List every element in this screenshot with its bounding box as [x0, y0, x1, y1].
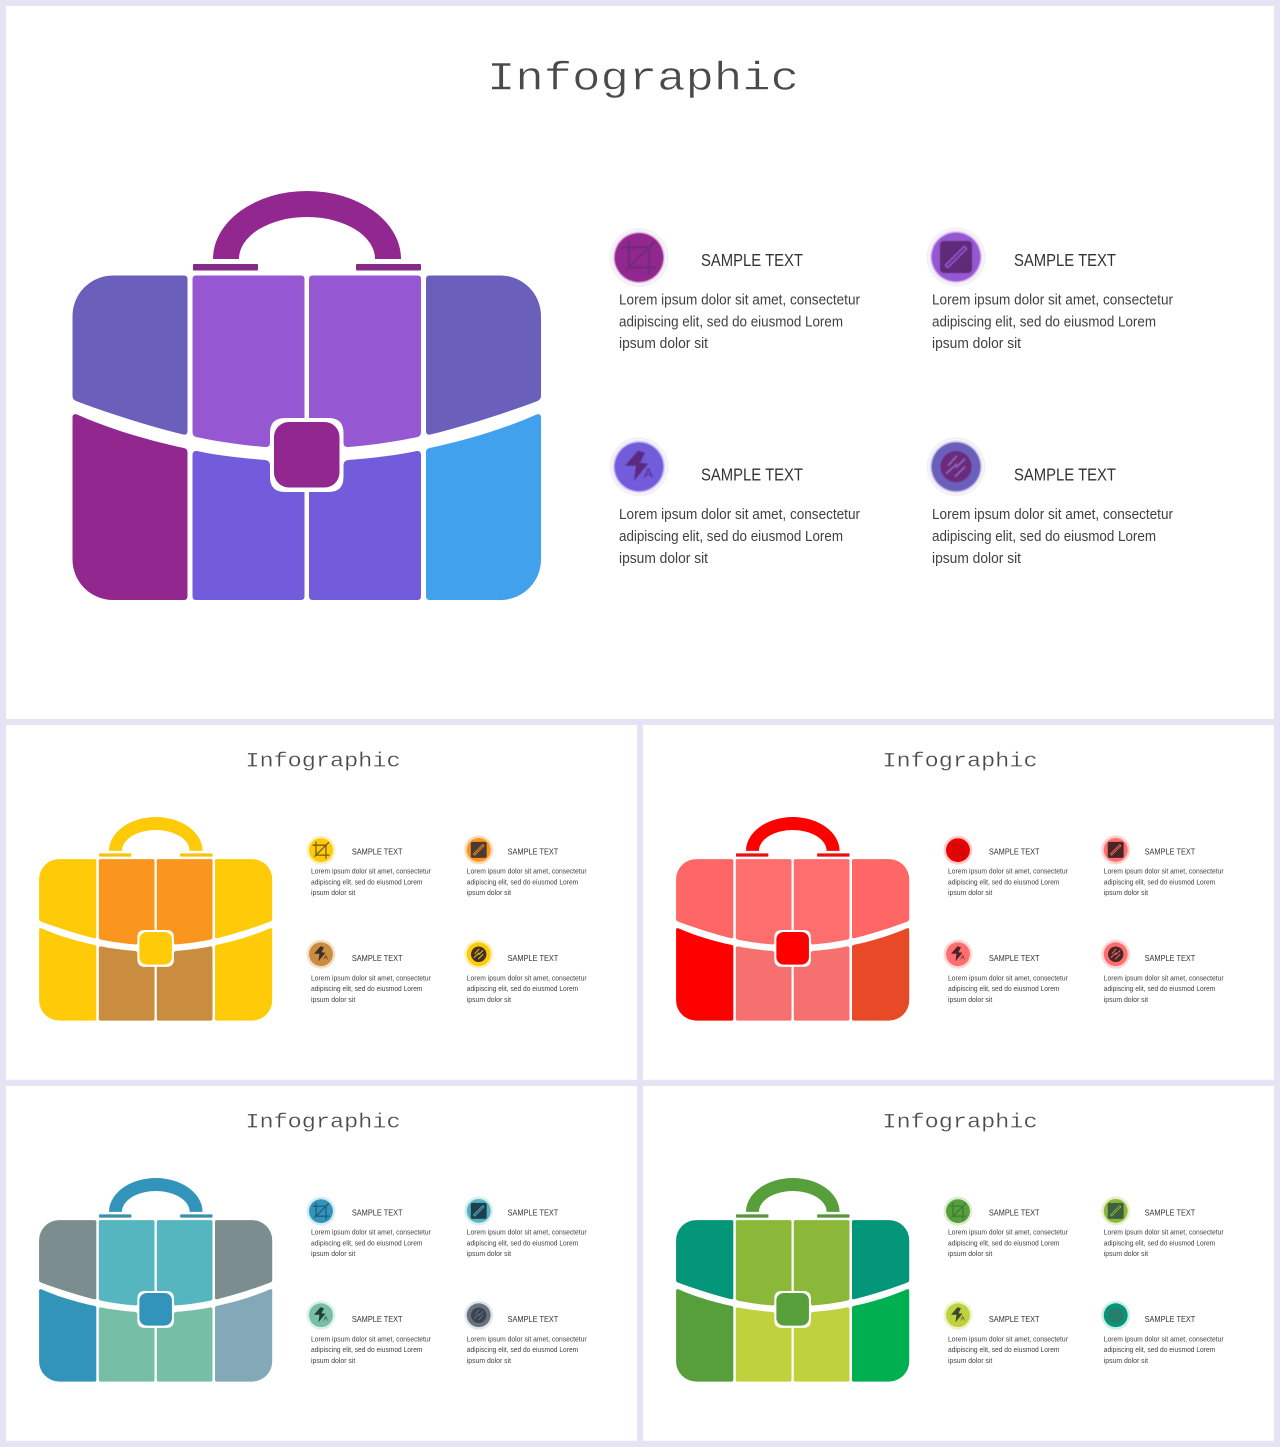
item 4: slashed circle icon and text: Lorem ipsum dolor sit amet, consectetur [467, 1335, 587, 1343]
item 2: pen icon and text: adipiscing elit, sed do eiusmod Lorem [467, 878, 578, 886]
title: Infographic [245, 750, 401, 773]
item 3: bolt icon and text: Lorem ipsum dolor sit amet, consectetur [311, 1335, 432, 1343]
item 2: pen icon and text: Lorem ipsum dolor sit amet, consectetur [467, 868, 587, 876]
item 1: crop icon and text: Lorem ipsum dolor sit amet, consectetur [948, 1229, 1069, 1237]
briefcase: green [676, 1178, 909, 1382]
item 3: bolt icon and text: A [960, 1316, 965, 1323]
item 3: bolt icon and text: Lorem ipsum dolor sit amet, consectetur [311, 974, 432, 982]
item 4: slashed circle icon and text: ipsum dolor sit [932, 551, 1021, 567]
item 4: slashed circle icon and text: adipiscing elit, sed do eiusmod Lorem [1104, 1346, 1215, 1354]
item 3: bolt icon and text: ipsum dolor sit [619, 551, 708, 567]
item 1: crop icon and text: SAMPLE TEXT [352, 846, 403, 856]
item 4: slashed circle icon and text: ipsum dolor sit [1104, 996, 1148, 1004]
title: Infographic [245, 1111, 401, 1134]
item 2: pen icon and text: Lorem ipsum dolor sit amet, consectetur [932, 292, 1173, 308]
item 3: bolt icon and text: A [323, 1316, 328, 1323]
briefcase: yellow [39, 817, 272, 1021]
item 2: pen icon and text: Lorem ipsum dolor sit amet, consectetur [1104, 1229, 1224, 1237]
item 2: pen icon and text: SAMPLE TEXT [1145, 1207, 1196, 1217]
item 4: slashed circle icon and text: ipsum dolor sit [467, 1357, 511, 1365]
item 3: bolt icon and text: Lorem ipsum dolor sit amet, consectetur [948, 1335, 1069, 1343]
item 1: crop icon and text: ipsum dolor sit [311, 889, 355, 897]
item 1: crop icon and text: SAMPLE TEXT [989, 846, 1040, 856]
item 3: bolt icon and text: adipiscing elit, sed do eiusmod Lorem [311, 1346, 423, 1354]
item 4: slashed circle icon and text: SAMPLE TEXT [508, 1314, 559, 1324]
item 2: pen icon and text: ipsum dolor sit [467, 889, 511, 897]
item 1: crop icon and text: adipiscing elit, sed do eiusmod Lorem [311, 878, 423, 886]
item 4: slashed circle icon and text: adipiscing elit, sed do eiusmod Lorem [932, 529, 1156, 545]
item 1: crop icon and text [610, 228, 860, 352]
item 3: bolt icon and text: adipiscing elit, sed do eiusmod Lorem [619, 529, 843, 545]
item 2: pen icon and text: SAMPLE TEXT [1145, 846, 1196, 856]
item 4: slashed circle icon and text: SAMPLE TEXT [1014, 465, 1116, 485]
item 1: crop icon and text [944, 836, 1069, 897]
item 4: slashed circle icon and text [464, 1301, 587, 1365]
item 2: pen icon and text [1101, 1196, 1224, 1258]
item 3: bolt icon and text [307, 940, 432, 1004]
item 3: bolt icon and text: ipsum dolor sit [948, 1357, 992, 1365]
item 2: pen icon and text: Lorem ipsum dolor sit amet, consectetur [1104, 868, 1224, 876]
item 2: pen icon and text [464, 835, 587, 897]
item 3: bolt icon and text: Lorem ipsum dolor sit amet, consectetur [619, 507, 860, 523]
item 4: slashed circle icon and text: Lorem ipsum dolor sit amet, consectetur [932, 507, 1173, 523]
item 1: crop icon and text: adipiscing elit, sed do eiusmod Lorem [948, 1239, 1060, 1247]
item 1: crop icon and text: Lorem ipsum dolor sit amet, consectetur [619, 292, 860, 308]
item 3: bolt icon and text: A [644, 466, 653, 481]
item 3: bolt icon and text: SAMPLE TEXT [352, 1314, 403, 1324]
item 2: pen icon and text: SAMPLE TEXT [1014, 250, 1116, 270]
item 3: bolt icon and text: SAMPLE TEXT [701, 465, 803, 485]
item 4: slashed circle icon and text: adipiscing elit, sed do eiusmod Lorem [1104, 985, 1215, 993]
title: Infographic [882, 750, 1038, 773]
item 1: crop icon and text [307, 1197, 432, 1258]
panel: yellow background [6, 725, 637, 1080]
item 3: bolt icon and text: adipiscing elit, sed do eiusmod Lorem [311, 985, 423, 993]
item 3: bolt icon and text: Lorem ipsum dolor sit amet, consectetur [948, 974, 1069, 982]
item 1: crop icon and text: SAMPLE TEXT [352, 1207, 403, 1217]
item 2: pen icon and text: ipsum dolor sit [1104, 889, 1148, 897]
item 4: slashed circle icon and text: Lorem ipsum dolor sit amet, consectetur [1104, 974, 1224, 982]
item 4: slashed circle icon and text [464, 940, 587, 1004]
item 4: slashed circle icon and text [927, 438, 1173, 567]
item 2: pen icon and text: adipiscing elit, sed do eiusmod Lorem [932, 314, 1156, 330]
panel: green background [643, 1086, 1274, 1441]
item 1: crop icon and text: ipsum dolor sit [311, 1250, 355, 1258]
item 1: crop icon and text: SAMPLE TEXT [989, 1207, 1040, 1217]
item 1: crop icon and text: Lorem ipsum dolor sit amet, consectetur [311, 1229, 432, 1237]
item 3: bolt icon and text [944, 940, 1069, 1004]
title: Infographic [487, 58, 799, 102]
item 2: pen icon and text: ipsum dolor sit [467, 1250, 511, 1258]
item 1: crop icon and text: SAMPLE TEXT [701, 250, 803, 270]
item 4: slashed circle icon and text: SAMPLE TEXT [1145, 1314, 1196, 1324]
item 4: slashed circle icon and text: adipiscing elit, sed do eiusmod Lorem [467, 1346, 578, 1354]
item 4: slashed circle icon and text: SAMPLE TEXT [508, 953, 559, 963]
item 4: slashed circle icon and text: Lorem ipsum dolor sit amet, consectetur [1104, 1335, 1224, 1343]
item 2: pen icon and text: SAMPLE TEXT [508, 1207, 559, 1217]
item 2: pen icon and text: ipsum dolor sit [932, 336, 1021, 352]
item 1: crop icon and text [944, 1197, 1069, 1258]
item 4: slashed circle icon and text: adipiscing elit, sed do eiusmod Lorem [467, 985, 578, 993]
item 1: crop icon and text: adipiscing elit, sed do eiusmod Lorem [948, 878, 1060, 886]
item 2: pen icon and text: ipsum dolor sit [1104, 1250, 1148, 1258]
item 1: crop icon and text: adipiscing elit, sed do eiusmod Lorem [619, 314, 843, 330]
item 3: bolt icon and text: SAMPLE TEXT [989, 1314, 1040, 1324]
item 3: bolt icon and text: adipiscing elit, sed do eiusmod Lorem [948, 985, 1060, 993]
item 1: crop icon and text: ipsum dolor sit [948, 1250, 992, 1258]
title: Infographic [882, 1111, 1038, 1134]
item 1: crop icon and text: ipsum dolor sit [619, 336, 708, 352]
panel: purple background [6, 6, 1274, 719]
item 2: pen icon and text: adipiscing elit, sed do eiusmod Lorem [467, 1239, 578, 1247]
slide: red infographic [643, 725, 1274, 1080]
item 4: slashed circle icon and text: Lorem ipsum dolor sit amet, consectetur [467, 974, 587, 982]
item 3: bolt icon and text [944, 1301, 1069, 1365]
item 3: bolt icon and text: ipsum dolor sit [311, 996, 355, 1004]
item 2: pen icon and text: SAMPLE TEXT [508, 846, 559, 856]
item 2: pen icon and text: Lorem ipsum dolor sit amet, consectetur [467, 1229, 587, 1237]
item 4: slashed circle icon and text [1101, 1301, 1224, 1365]
slide: purple infographic [6, 6, 1274, 719]
item 4: slashed circle icon and text [1101, 940, 1224, 1004]
panel: red background [643, 725, 1274, 1080]
item 3: bolt icon and text: SAMPLE TEXT [352, 953, 403, 963]
item 3: bolt icon and text [610, 438, 860, 567]
item 3: bolt icon and text: adipiscing elit, sed do eiusmod Lorem [948, 1346, 1060, 1354]
briefcase: teal [39, 1178, 272, 1382]
slide: teal infographic [6, 1086, 637, 1441]
item 3: bolt icon and text: A [960, 955, 965, 962]
item 1: crop icon and text: Lorem ipsum dolor sit amet, consectetur [311, 868, 432, 876]
slide: yellow infographic [6, 725, 637, 1080]
item 4: slashed circle icon and text: SAMPLE TEXT [1145, 953, 1196, 963]
item 4: slashed circle icon and text: ipsum dolor sit [467, 996, 511, 1004]
panel: teal background [6, 1086, 637, 1441]
item 3: bolt icon and text: ipsum dolor sit [948, 996, 992, 1004]
item 3: bolt icon and text: A [323, 955, 328, 962]
item 3: bolt icon and text [307, 1301, 432, 1365]
item 4: slashed circle icon and text: ipsum dolor sit [1104, 1357, 1148, 1365]
slide: green infographic [643, 1086, 1274, 1441]
item 1: crop icon and text: Lorem ipsum dolor sit amet, consectetur [948, 868, 1069, 876]
briefcase: purple [72, 191, 541, 600]
item 3: bolt icon and text: SAMPLE TEXT [989, 953, 1040, 963]
item 2: pen icon and text [927, 228, 1173, 352]
briefcase: red [676, 817, 909, 1021]
item 2: pen icon and text [1101, 835, 1224, 897]
item 2: pen icon and text [464, 1196, 587, 1258]
item 1: crop icon and text [307, 836, 432, 897]
item 1: crop icon and text: ipsum dolor sit [948, 889, 992, 897]
item 2: pen icon and text: adipiscing elit, sed do eiusmod Lorem [1104, 1239, 1215, 1247]
item 3: bolt icon and text: ipsum dolor sit [311, 1357, 355, 1365]
item 1: crop icon and text: adipiscing elit, sed do eiusmod Lorem [311, 1239, 423, 1247]
item 2: pen icon and text: adipiscing elit, sed do eiusmod Lorem [1104, 878, 1215, 886]
